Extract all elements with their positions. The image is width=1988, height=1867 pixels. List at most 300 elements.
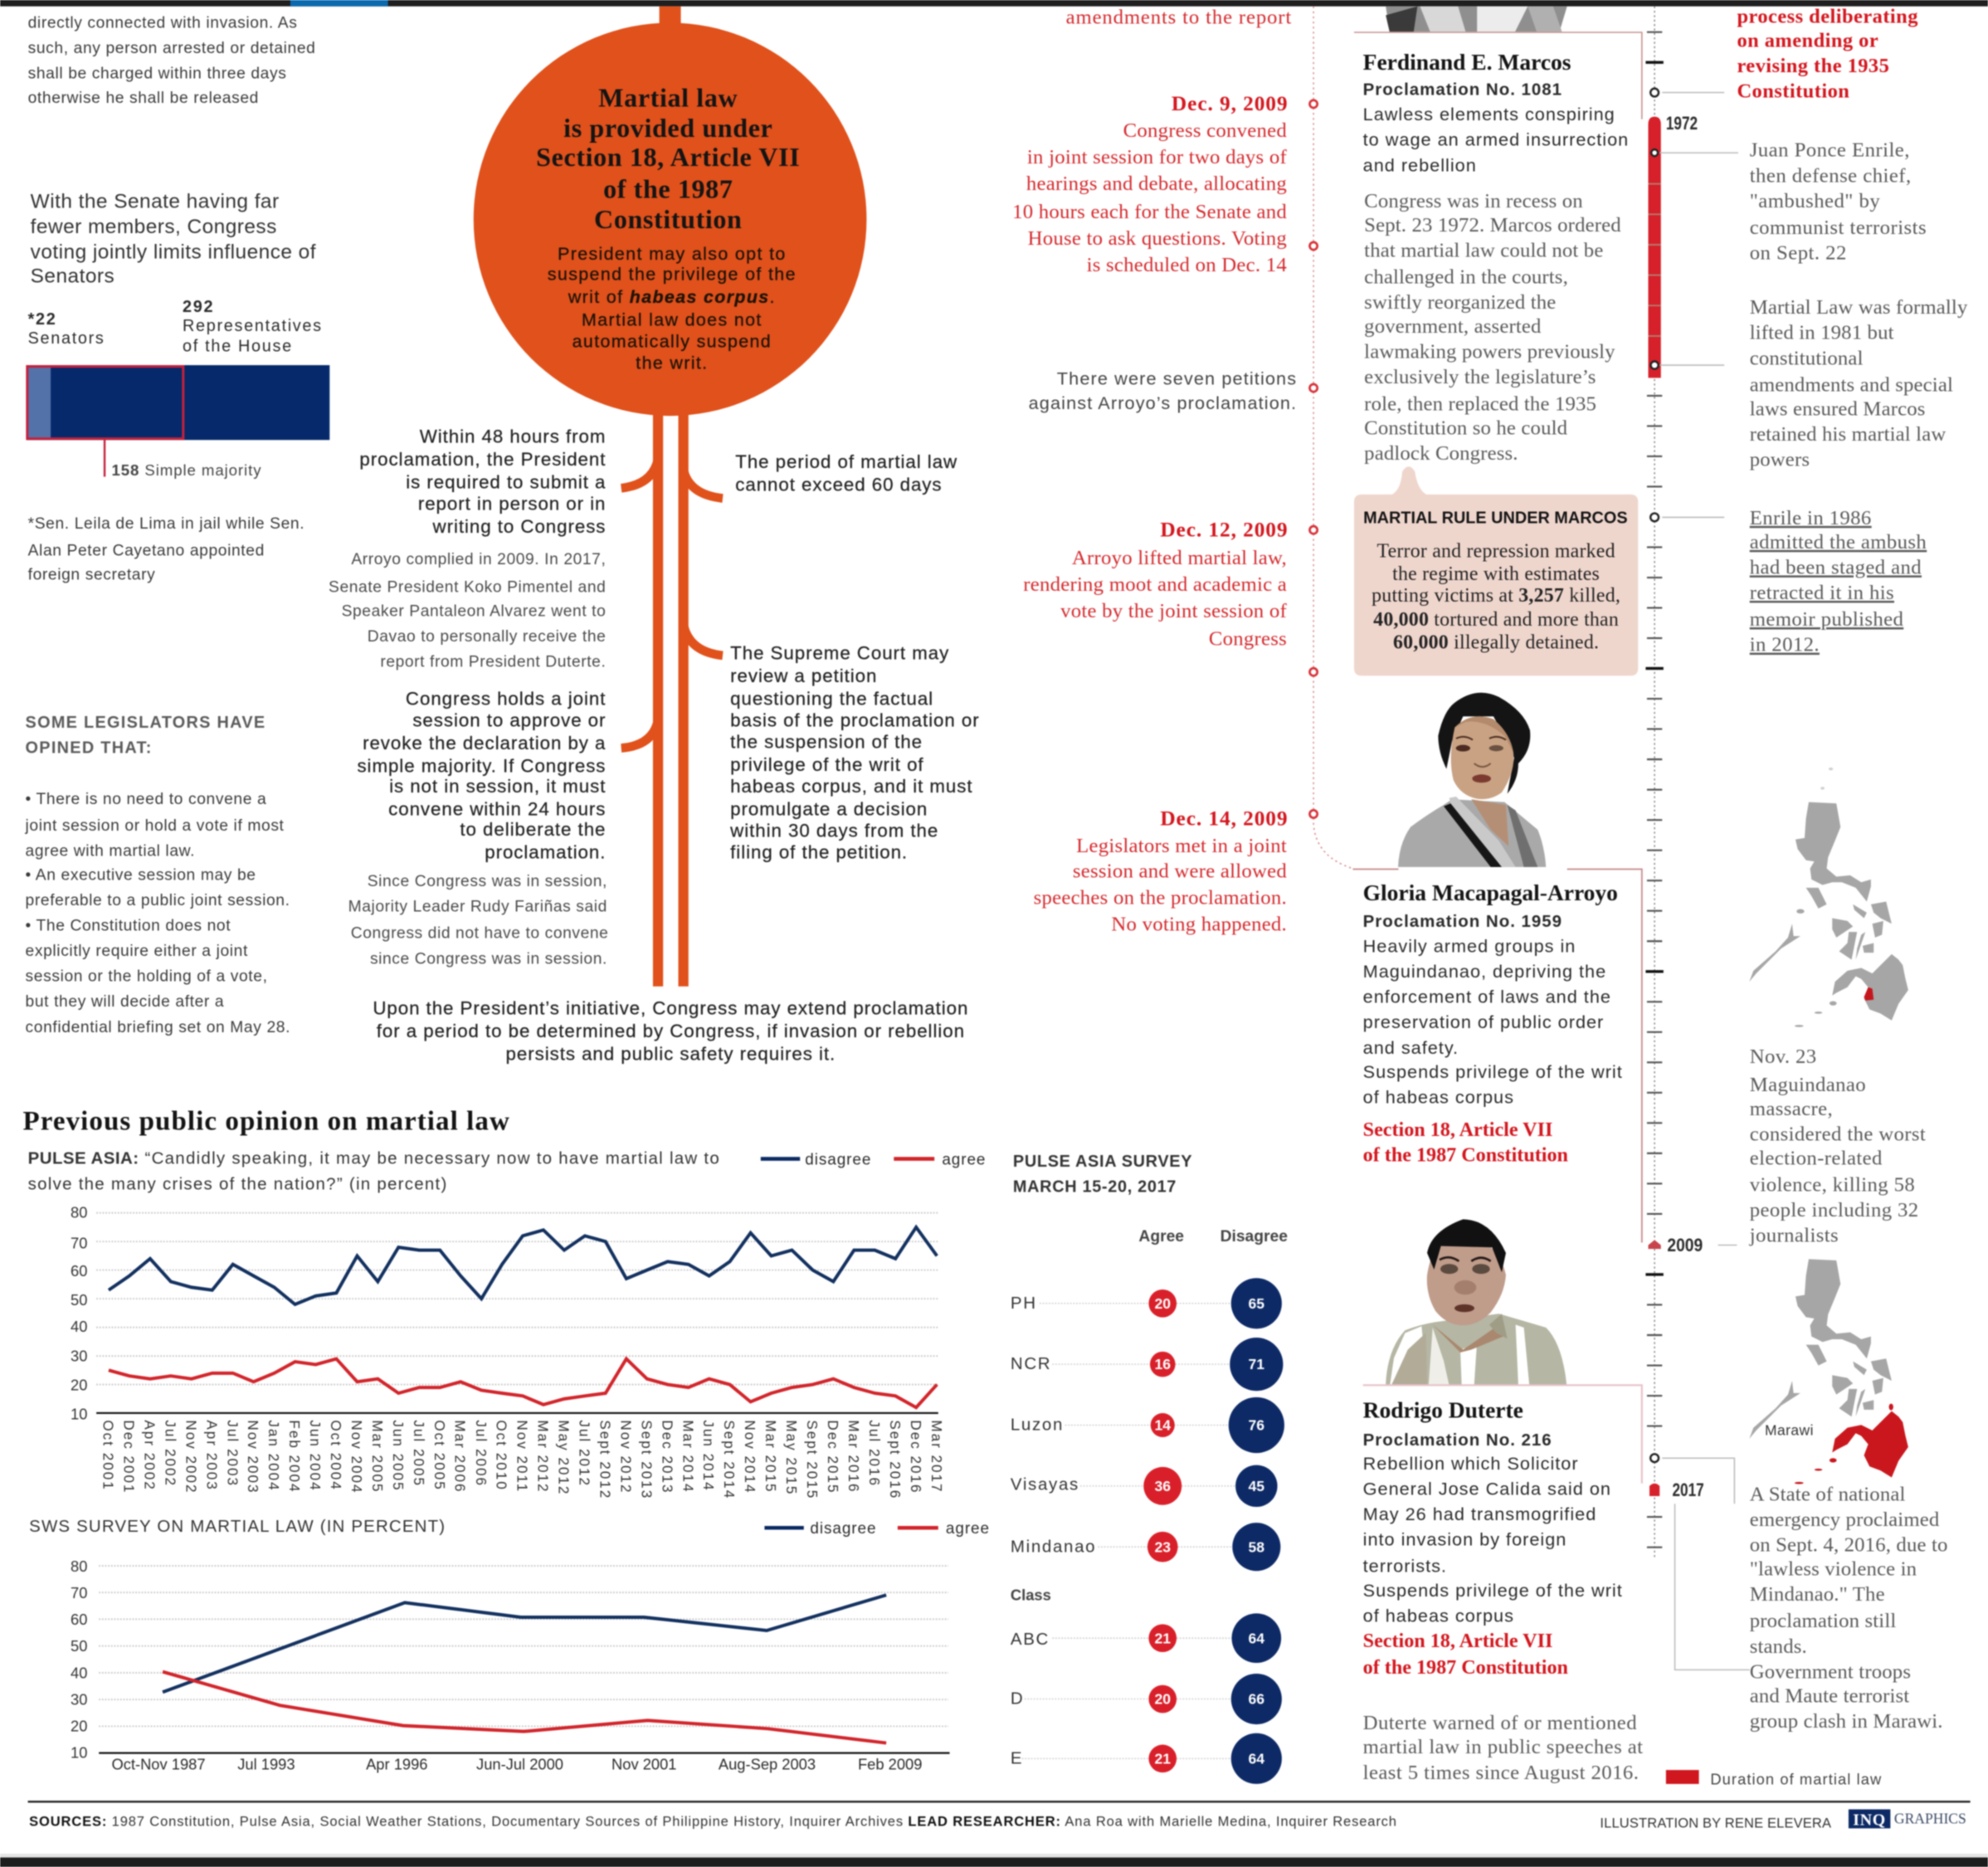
bubble chart: survey: 66 [1249, 1691, 1264, 1708]
bubble chart: survey: E [1011, 1748, 1023, 1767]
text: supreme court: within 30 days from the [729, 820, 938, 841]
text: maguindanao massacre: massacre, [1750, 1098, 1833, 1120]
bubble chart: survey: Mindanao [1011, 1537, 1096, 1556]
text: farinas: Congress did not have to convene [351, 925, 608, 943]
text: joint session: convene within 24 hours [388, 799, 606, 820]
legend: chart two: agree [946, 1520, 990, 1538]
text: joint session: to deliberate the [460, 819, 606, 840]
line chart: pulse asia: Nov 2011 [514, 1420, 530, 1493]
line chart: pulse asia: Nov 2014 [742, 1420, 758, 1494]
map: mindanao [1749, 1259, 1908, 1484]
line chart: pulse asia: 70 [71, 1234, 87, 1251]
footnote: foreign secretary [28, 566, 155, 583]
text: 60 days: cannot exceed 60 days [735, 474, 943, 495]
text: farinas: since Congress was in session. [370, 950, 607, 968]
callout: martial rule under marcos: 60,000 illegally detained. [1393, 632, 1599, 654]
text: supreme court: questioning the factual [730, 689, 933, 709]
line chart: pulse asia: Mar 2005 [369, 1420, 385, 1494]
text: enrile ambushed: "ambushed" by [1750, 190, 1880, 212]
line chart: pulse asia [71, 1204, 944, 1499]
bubble chart: survey: 45 [1249, 1478, 1264, 1494]
line chart: sws: 30 [71, 1690, 87, 1708]
top bar [0, 0, 1988, 7]
text: enrile ambushed: on Sept. 22 [1750, 241, 1847, 264]
text: supreme court: basis of the proclamation or [730, 710, 980, 731]
name: marcos: and rebellion [1363, 154, 1477, 175]
senate and house labels: *22 [28, 310, 56, 329]
text: constitution deliberations [1737, 6, 1918, 103]
text: arroyo complied: Arroyo complied in 2009. In 2017, [351, 551, 606, 568]
line chart: sws: Aug-Sep 2003 [719, 1755, 816, 1772]
line chart: pulse asia: Sept 2016 [887, 1420, 903, 1499]
text: national emergency: Government troops [1750, 1660, 1911, 1683]
text: 60 days [735, 451, 957, 495]
heading: public opinion: Previous public opinion on martial law [23, 1106, 510, 1136]
line chart: pulse asia: Jan 2004 [266, 1420, 281, 1492]
line chart: sws: 60 [71, 1611, 87, 1628]
list: opinions: • The Constitution does not [26, 918, 231, 935]
text: joint session [357, 689, 606, 862]
text: constitution deliberations: on amending or [1737, 30, 1878, 52]
line chart: pulse asia: Feb 2004 [286, 1420, 302, 1494]
text: national emergency: and Maute terrorist [1750, 1684, 1909, 1707]
text: farinas [348, 873, 608, 968]
bubble chart: survey: D [1011, 1689, 1024, 1709]
line chart: pulse asia: Oct 2001 [100, 1420, 116, 1491]
name: arroyo: Suspends privilege of the writ [1363, 1061, 1623, 1082]
line chart: pulse asia: Nov 2012 [617, 1420, 633, 1494]
name: arroyo: Proclamation No. 1959 [1363, 912, 1562, 931]
bubble chart: survey: 64 [1249, 1630, 1264, 1646]
circle: martial law: Martial law [598, 82, 738, 112]
text: marcos narrative: Congress was in recess on [1364, 190, 1583, 212]
list: opinions [25, 791, 290, 1036]
text: senate influence: voting jointly limits influence of [31, 241, 316, 264]
name: duterte: Proclamation No. 216 [1363, 1431, 1552, 1450]
text: national emergency: stands. [1750, 1635, 1807, 1658]
circle: martial law: Section 18, Article VII [536, 142, 800, 172]
event: dec 14: No voting happened. [1111, 914, 1287, 936]
line chart: sws: Nov 2001 [612, 1755, 676, 1772]
text: senate influence: With the Senate having far [31, 191, 280, 213]
senate and house labels [28, 298, 323, 355]
line chart: sws: 70 [71, 1584, 87, 1601]
event: dec 9: Congress convened [1123, 119, 1287, 142]
line chart: sws: 10 [71, 1744, 87, 1762]
line chart: pulse asia: Mar 2016 [845, 1420, 861, 1494]
text: enrile admission: had been staged and [1750, 556, 1922, 578]
line chart: sws: Feb 2009 [858, 1755, 922, 1772]
event: dec 12 [1023, 518, 1289, 651]
line chart: pulse asia: Jun 2004 [307, 1420, 323, 1492]
bottom bar [0, 1854, 1988, 1867]
text: duterte warned [1363, 1712, 1643, 1784]
ruler timeline: 1972 [1666, 113, 1698, 134]
list: opinions: • An executive session may be [26, 866, 256, 884]
text: national emergency: "lawless violence in [1750, 1558, 1917, 1581]
heading: pulse asia survey: PULSE ASIA SURVEY [1013, 1153, 1192, 1171]
name: duterte: into invasion by foreign [1363, 1529, 1567, 1550]
legend: chart one: disagree [805, 1151, 871, 1168]
event: dec 9: hearings and debate, allocating [1026, 173, 1287, 195]
text: amendments: amendments to the report [1066, 6, 1292, 28]
text: joint session: Congress holds a joint [406, 689, 606, 709]
text: arroyo complied [329, 551, 606, 671]
chart intro: pulse asia [28, 1149, 720, 1193]
text: supreme court: promulgate a decision [730, 799, 928, 820]
tree stems and branches [621, 7, 723, 987]
text: duterte warned: Duterte warned of or mentioned [1363, 1712, 1637, 1734]
name: arroyo: Section 18, Article VII [1363, 1119, 1552, 1141]
line chart: pulse asia: Oct 2004 [328, 1420, 344, 1491]
text: arrest rule: shall be charged within three days [28, 66, 286, 83]
text: arroyo complied: Senate President Koko Pimentel and [329, 579, 606, 597]
line chart: pulse asia: Jun 2005 [390, 1420, 406, 1492]
text: marcos narrative: government, asserted [1364, 315, 1542, 338]
text: marcos narrative: role, then replaced the 1935 [1364, 392, 1596, 415]
text: marcos narrative: that martial law could not be [1364, 239, 1603, 261]
list: opinions: preferable to a public joint session. [26, 892, 290, 909]
line chart: pulse asia: Jul 2002 [162, 1420, 178, 1487]
bubble chart: survey: 36 [1154, 1478, 1171, 1494]
text: arroyo complied: report from President Duterte. [380, 654, 606, 671]
text: maguindanao massacre: considered the worst [1750, 1123, 1926, 1145]
name: duterte: of the 1987 Constitution [1363, 1656, 1569, 1679]
list: opinions: session or the holding of a vote, [26, 968, 268, 986]
line chart: pulse asia: Apr 2002 [142, 1420, 158, 1491]
text: national emergency: emergency proclaimed [1750, 1509, 1940, 1531]
text: farinas: Since Congress was in session, [368, 873, 607, 890]
text: maguindanao massacre: Nov. 23 [1750, 1046, 1817, 1068]
bubble chart: survey: NCR [1011, 1354, 1051, 1373]
line chart: pulse asia: 80 [71, 1204, 87, 1221]
event: dec 12: Congress [1209, 628, 1287, 651]
list: opinions: • There is no need to convene a [26, 791, 266, 808]
bubble chart: survey: 23 [1154, 1538, 1171, 1555]
connector lines: arroyo [1352, 869, 1642, 1242]
circle: martial law: Martial law does not [582, 310, 763, 330]
portrait: duterte [1386, 1219, 1567, 1386]
bubble chart: survey: 65 [1249, 1295, 1264, 1312]
text: national emergency: A State of national [1750, 1483, 1906, 1505]
bubble chart: survey: 21 [1154, 1630, 1171, 1646]
text: supreme court: The Supreme Court may [730, 643, 949, 664]
name: marcos: Ferdinand E. Marcos [1363, 49, 1571, 75]
text: maguindanao massacre: violence, killing 58 [1750, 1174, 1915, 1197]
event: dec 12: vote by the joint session of [1060, 600, 1287, 622]
text: arrest rule [28, 15, 315, 107]
footer rule [28, 1801, 1971, 1802]
line chart: pulse asia: Mar 2014 [680, 1420, 695, 1494]
text: constitution deliberations: revising the 1935 [1737, 55, 1889, 77]
text: enrile admission: admitted the ambush [1750, 531, 1927, 553]
text: arrest rule: otherwise he shall be released [28, 90, 259, 107]
text: enrile admission: in 2012. [1750, 634, 1820, 656]
event: dec 9: is scheduled on Dec. 14 [1087, 254, 1287, 276]
text: arroyo complied: Davao to personally receive the [368, 628, 606, 646]
line chart: pulse asia: Dec 2016 [908, 1420, 923, 1494]
text: maguindanao massacre: Maguindanao [1750, 1074, 1866, 1096]
senate and house labels: Representatives [183, 317, 323, 335]
text: duterte warned: martial law in public speeches at [1363, 1736, 1643, 1758]
line chart: sws: 50 [71, 1637, 87, 1655]
callout: martial rule under marcos: 40,000 tortured and more than [1373, 609, 1619, 631]
text: senate influence: fewer members, Congress [31, 216, 277, 238]
text: marcos narrative: challenged in the courts, [1364, 266, 1568, 289]
name: arroyo: and safety. [1363, 1037, 1459, 1058]
name: duterte [1363, 1397, 1623, 1679]
bubble chart: survey: 76 [1249, 1417, 1264, 1434]
text: national emergency [1750, 1483, 1948, 1733]
footnote [28, 515, 305, 583]
text: maguindanao massacre: election-related [1750, 1147, 1883, 1169]
list: opinions: joint session or hold a vote if most [25, 817, 285, 835]
line chart: pulse asia: Apr 2003 [203, 1420, 219, 1491]
ruler timeline: 2017 [1673, 1479, 1704, 1500]
illustration credit: ILLUSTRATION BY RENE ELEVERA [1600, 1816, 1831, 1831]
line chart: pulse asia: Mar 2006 [452, 1420, 468, 1494]
line chart: pulse asia: Jul 2012 [576, 1420, 592, 1487]
line chart: pulse asia: Oct 2010 [494, 1420, 509, 1491]
name: arroyo: preservation of public order [1363, 1011, 1604, 1032]
text: national emergency: group clash in Marawi. [1750, 1710, 1943, 1733]
bubble chart: survey: 14 [1154, 1417, 1171, 1434]
text: marcos narrative: Constitution so he could [1364, 417, 1568, 439]
line chart: pulse asia: Nov 2003 [245, 1420, 261, 1494]
red dotted timeline 2009 [1309, 7, 1352, 869]
text: marcos narrative: Sept. 23 1972. Marcos ordered [1364, 214, 1621, 236]
list: opinions: but they will decide after a [26, 993, 224, 1011]
text: 48 hour report [359, 426, 606, 537]
chart intro: pulse asia: PULSE ASIA: “Candidly speaking, it may be necessary now to have martial law to [28, 1149, 720, 1168]
event: dec 14 [1034, 807, 1289, 936]
circle: martial law: the writ. [636, 353, 708, 373]
text: senate influence [31, 191, 316, 288]
text: martial law lifted: Martial Law was formally [1750, 296, 1968, 319]
text: extension: for a period to be determined by Congress, if invasion or rebellion [377, 1021, 965, 1041]
line chart: sws: Jul 1993 [237, 1755, 295, 1772]
line chart: sws [71, 1557, 950, 1772]
line chart: pulse asia: Nov 2002 [183, 1420, 198, 1494]
line chart: pulse asia: May 2012 [556, 1420, 572, 1495]
bubble chart: survey: 71 [1249, 1356, 1264, 1372]
bubble chart: survey: 20 [1154, 1691, 1171, 1708]
text: 48 hour report: Within 48 hours from [420, 426, 606, 446]
text: maguindanao massacre [1749, 1046, 1926, 1247]
portrait: marcos [1386, 7, 1567, 32]
event: dec 14: session and were allowed [1073, 860, 1287, 882]
text: 48 hour report: report in person or in [418, 493, 606, 514]
event: dec 9: Dec. 9, 2009 [1172, 92, 1289, 115]
event: dec 14: Dec. 14, 2009 [1160, 807, 1289, 831]
bubble chart: survey: Class [1011, 1586, 1051, 1603]
text: joint session: is not in session, it must [389, 776, 606, 797]
text: extension: persists and public safety requires it. [506, 1043, 836, 1064]
circle: martial law: of the 1987 [603, 173, 733, 203]
line chart: pulse asia: 10 [71, 1406, 87, 1423]
text: extension [373, 997, 968, 1064]
line chart: pulse asia: 20 [71, 1376, 87, 1393]
line chart: sws: 20 [71, 1718, 87, 1735]
text: martial law lifted: laws ensured Marcos [1750, 397, 1926, 420]
bar: congress composition [27, 365, 329, 479]
list: opinions: confidential briefing set on May 28. [26, 1019, 290, 1036]
text: enrile ambushed: then defense chief, [1750, 164, 1912, 187]
circle: martial law: writ of habeas corpus. [568, 287, 776, 307]
text: arrest rule: directly connected with invasion. As [28, 15, 297, 32]
event: dec 14: speeches on the proclamation. [1034, 886, 1287, 909]
text: supreme court: habeas corpus, and it must [730, 776, 973, 797]
name: duterte: May 26 had transmogrified [1363, 1504, 1596, 1524]
connector lines: duterte [1363, 1385, 1642, 1484]
logo: inq graphics: INQ [1853, 1811, 1886, 1830]
circle: martial law: President may also opt to [558, 244, 787, 264]
heading: pulse asia survey: MARCH 15-20, 2017 [1013, 1177, 1177, 1196]
callout: martial rule under marcos: MARTIAL RULE UNDER MARCOS [1363, 509, 1628, 527]
text: seven petitions [1029, 368, 1297, 413]
name: marcos: Lawless elements conspiring [1363, 104, 1615, 124]
name: arroyo: Maguindanao, depriving the [1363, 961, 1606, 982]
bubble chart: survey: 20 [1154, 1295, 1171, 1312]
line chart: sws: Jun-Jul 2000 [476, 1755, 563, 1772]
heading: some legislators: SOME LEGISLATORS HAVE [26, 714, 266, 732]
line chart: pulse asia: Jul 2003 [224, 1420, 240, 1487]
name: arroyo: of habeas corpus [1363, 1086, 1514, 1107]
text: marcos narrative: swiftly reorganized the [1364, 291, 1556, 314]
list: opinions: agree with martial law. [26, 842, 195, 860]
event: dec 12: Arroyo lifted martial law, [1072, 547, 1287, 569]
callout: martial rule under marcos: the regime with estimates [1392, 563, 1600, 585]
text: seven petitions: against Arroyo’s proclamation. [1029, 392, 1297, 413]
line chart: sws: Apr 1996 [366, 1755, 427, 1772]
text: martial law lifted: constitutional [1750, 347, 1864, 369]
name: arroyo [1363, 880, 1623, 1167]
line chart: pulse asia: Sept 2012 [597, 1420, 612, 1499]
text: 60 days: The period of martial law [735, 451, 957, 472]
text: national emergency: proclamation still [1750, 1610, 1896, 1632]
text: maguindanao massacre: journalists [1749, 1225, 1839, 1247]
circle: martial law: Constitution [594, 204, 743, 234]
name: arroyo: Heavily armed groups in [1363, 936, 1576, 957]
name: marcos [1363, 49, 1629, 175]
line chart: sws: 40 [71, 1664, 87, 1681]
line chart: pulse asia: Mar 2015 [763, 1420, 778, 1494]
text: marcos narrative [1364, 190, 1621, 465]
bar: congress composition: 158 Simple majority [111, 461, 261, 479]
bubble chart: survey: 21 [1154, 1750, 1171, 1767]
text: farinas: Majority Leader Rudy Fariñas said [348, 899, 607, 916]
survey headers: Agree [1138, 1228, 1184, 1245]
senate and house labels: Senators [28, 329, 105, 348]
text: arroyo complied: Speaker Pantaleon Alvarez went to [342, 603, 606, 621]
text: martial law lifted: amendments and special [1750, 373, 1953, 396]
list: opinions: explicitly require either a joint [26, 943, 248, 960]
line chart: pulse asia: Jul 2005 [411, 1420, 426, 1487]
senate and house labels: 292 [183, 298, 214, 316]
line chart: pulse asia: Oct 2005 [431, 1420, 447, 1491]
text: 48 hour report: proclamation, the President [359, 449, 606, 470]
heading: some legislators: OPINED THAT: [26, 739, 153, 758]
callout: martial rule under marcos [1354, 466, 1638, 675]
name: duterte: General Jose Calida said on [1363, 1479, 1611, 1499]
bubble chart: survey: PH [1011, 1294, 1037, 1313]
line chart: pulse asia: May 2015 [783, 1420, 799, 1495]
text: maguindanao massacre: people including 32 [1750, 1199, 1919, 1221]
name: marcos: Proclamation No. 1081 [1363, 80, 1562, 100]
text: enrile admission [1750, 507, 1927, 656]
text: supreme court: the suspension of the [730, 732, 923, 753]
legend: chart two: disagree [810, 1520, 876, 1538]
name: duterte: Rodrigo Duterte [1363, 1397, 1523, 1422]
logo: inq graphics [1849, 1809, 1966, 1830]
portrait: arroyo [1398, 693, 1546, 867]
text: national emergency: on Sept. 4, 2016, due to [1750, 1534, 1948, 1557]
text: 48 hour report: is required to submit a [406, 471, 606, 492]
event: dec 12: Dec. 12, 2009 [1160, 518, 1289, 541]
red bar: marcos martial law [1648, 117, 1661, 378]
event: dec 12: rendering moot and academic a [1023, 573, 1287, 596]
survey headers: Disagree [1221, 1228, 1288, 1245]
line chart: pulse asia: Nov 2004 [348, 1420, 364, 1494]
line chart: pulse asia: 50 [71, 1291, 87, 1309]
line chart: sws: Oct-Nov 1987 [111, 1755, 206, 1772]
text: martial law lifted: retained his martial law [1750, 423, 1946, 446]
text: enrile admission: memoir published [1750, 608, 1903, 631]
text: martial law lifted [1750, 296, 1968, 471]
text: joint session: proclamation. [485, 841, 606, 862]
text: joint session: simple majority. If Congress [357, 756, 606, 777]
circle: martial law: is provided under [563, 113, 772, 143]
line chart: pulse asia: Mar 2017 [928, 1420, 944, 1494]
name: arroyo: Gloria Macapagal-Arroyo [1363, 880, 1618, 905]
ruler timeline: 2009 [1667, 1235, 1703, 1255]
text: enrile admission: Enrile in 1986 [1750, 507, 1872, 529]
footnote: Alan Peter Cayetano appointed [28, 542, 265, 559]
text: constitution deliberations: Constitution [1737, 80, 1849, 103]
bubble chart: survey: ABC [1011, 1630, 1050, 1649]
name: arroyo: enforcement of laws and the [1363, 987, 1611, 1007]
text: arrest rule: such, any person arrested or detained [28, 40, 315, 57]
logo: inq graphics: GRAPHICS [1894, 1810, 1966, 1826]
connector lines: right column [1659, 93, 1750, 1670]
line chart: sws: 80 [71, 1557, 87, 1575]
senate and house labels: of the House [183, 337, 293, 355]
text: national emergency: Mindanao." The [1750, 1583, 1885, 1606]
name: duterte: Suspends privilege of the writ [1363, 1580, 1623, 1601]
text: senate influence: Senators [31, 266, 115, 288]
name: duterte: of habeas corpus [1363, 1605, 1514, 1626]
event: dec 9: 10 hours each for the Senate and [1012, 201, 1287, 223]
text: enrile ambushed: Juan Ponce Enrile, [1750, 139, 1910, 162]
event: dec 9: House to ask questions. Voting [1028, 227, 1287, 250]
legend: duration: Duration of martial law [1710, 1771, 1882, 1788]
text: martial law lifted: lifted in 1981 but [1750, 322, 1894, 344]
line chart: pulse asia: Jul 2006 [473, 1420, 489, 1487]
heading: sws survey: SWS SURVEY ON MARTIAL LAW (IN PERCENT) [29, 1517, 446, 1536]
text: constitution deliberations: process deliberating [1737, 6, 1918, 28]
footnote: *Sen. Leila de Lima in jail while Sen. [28, 515, 305, 533]
bubble chart: survey: Luzon [1011, 1416, 1064, 1435]
text: joint session: revoke the declaration by a [363, 733, 606, 753]
line chart: pulse asia: Jul 2016 [866, 1420, 882, 1487]
sources: SOURCES: 1987 Constitution, Pulse Asia, Social Weather Stations, Documentary Sources of Philippine History, Inquirer Archives LEAD RESEARCHER: Ana Roa with Marielle Medina, Inquirer Research [29, 1814, 1397, 1829]
label: marawi: Marawi [1765, 1422, 1814, 1439]
line chart: pulse asia: Sept 2015 [804, 1420, 820, 1499]
line chart: pulse asia: Sept 2013 [638, 1420, 654, 1499]
line chart: pulse asia: Sept 2014 [721, 1420, 737, 1499]
text: supreme court [729, 643, 980, 862]
event: dec 14: Legislators met in a joint [1076, 835, 1287, 857]
